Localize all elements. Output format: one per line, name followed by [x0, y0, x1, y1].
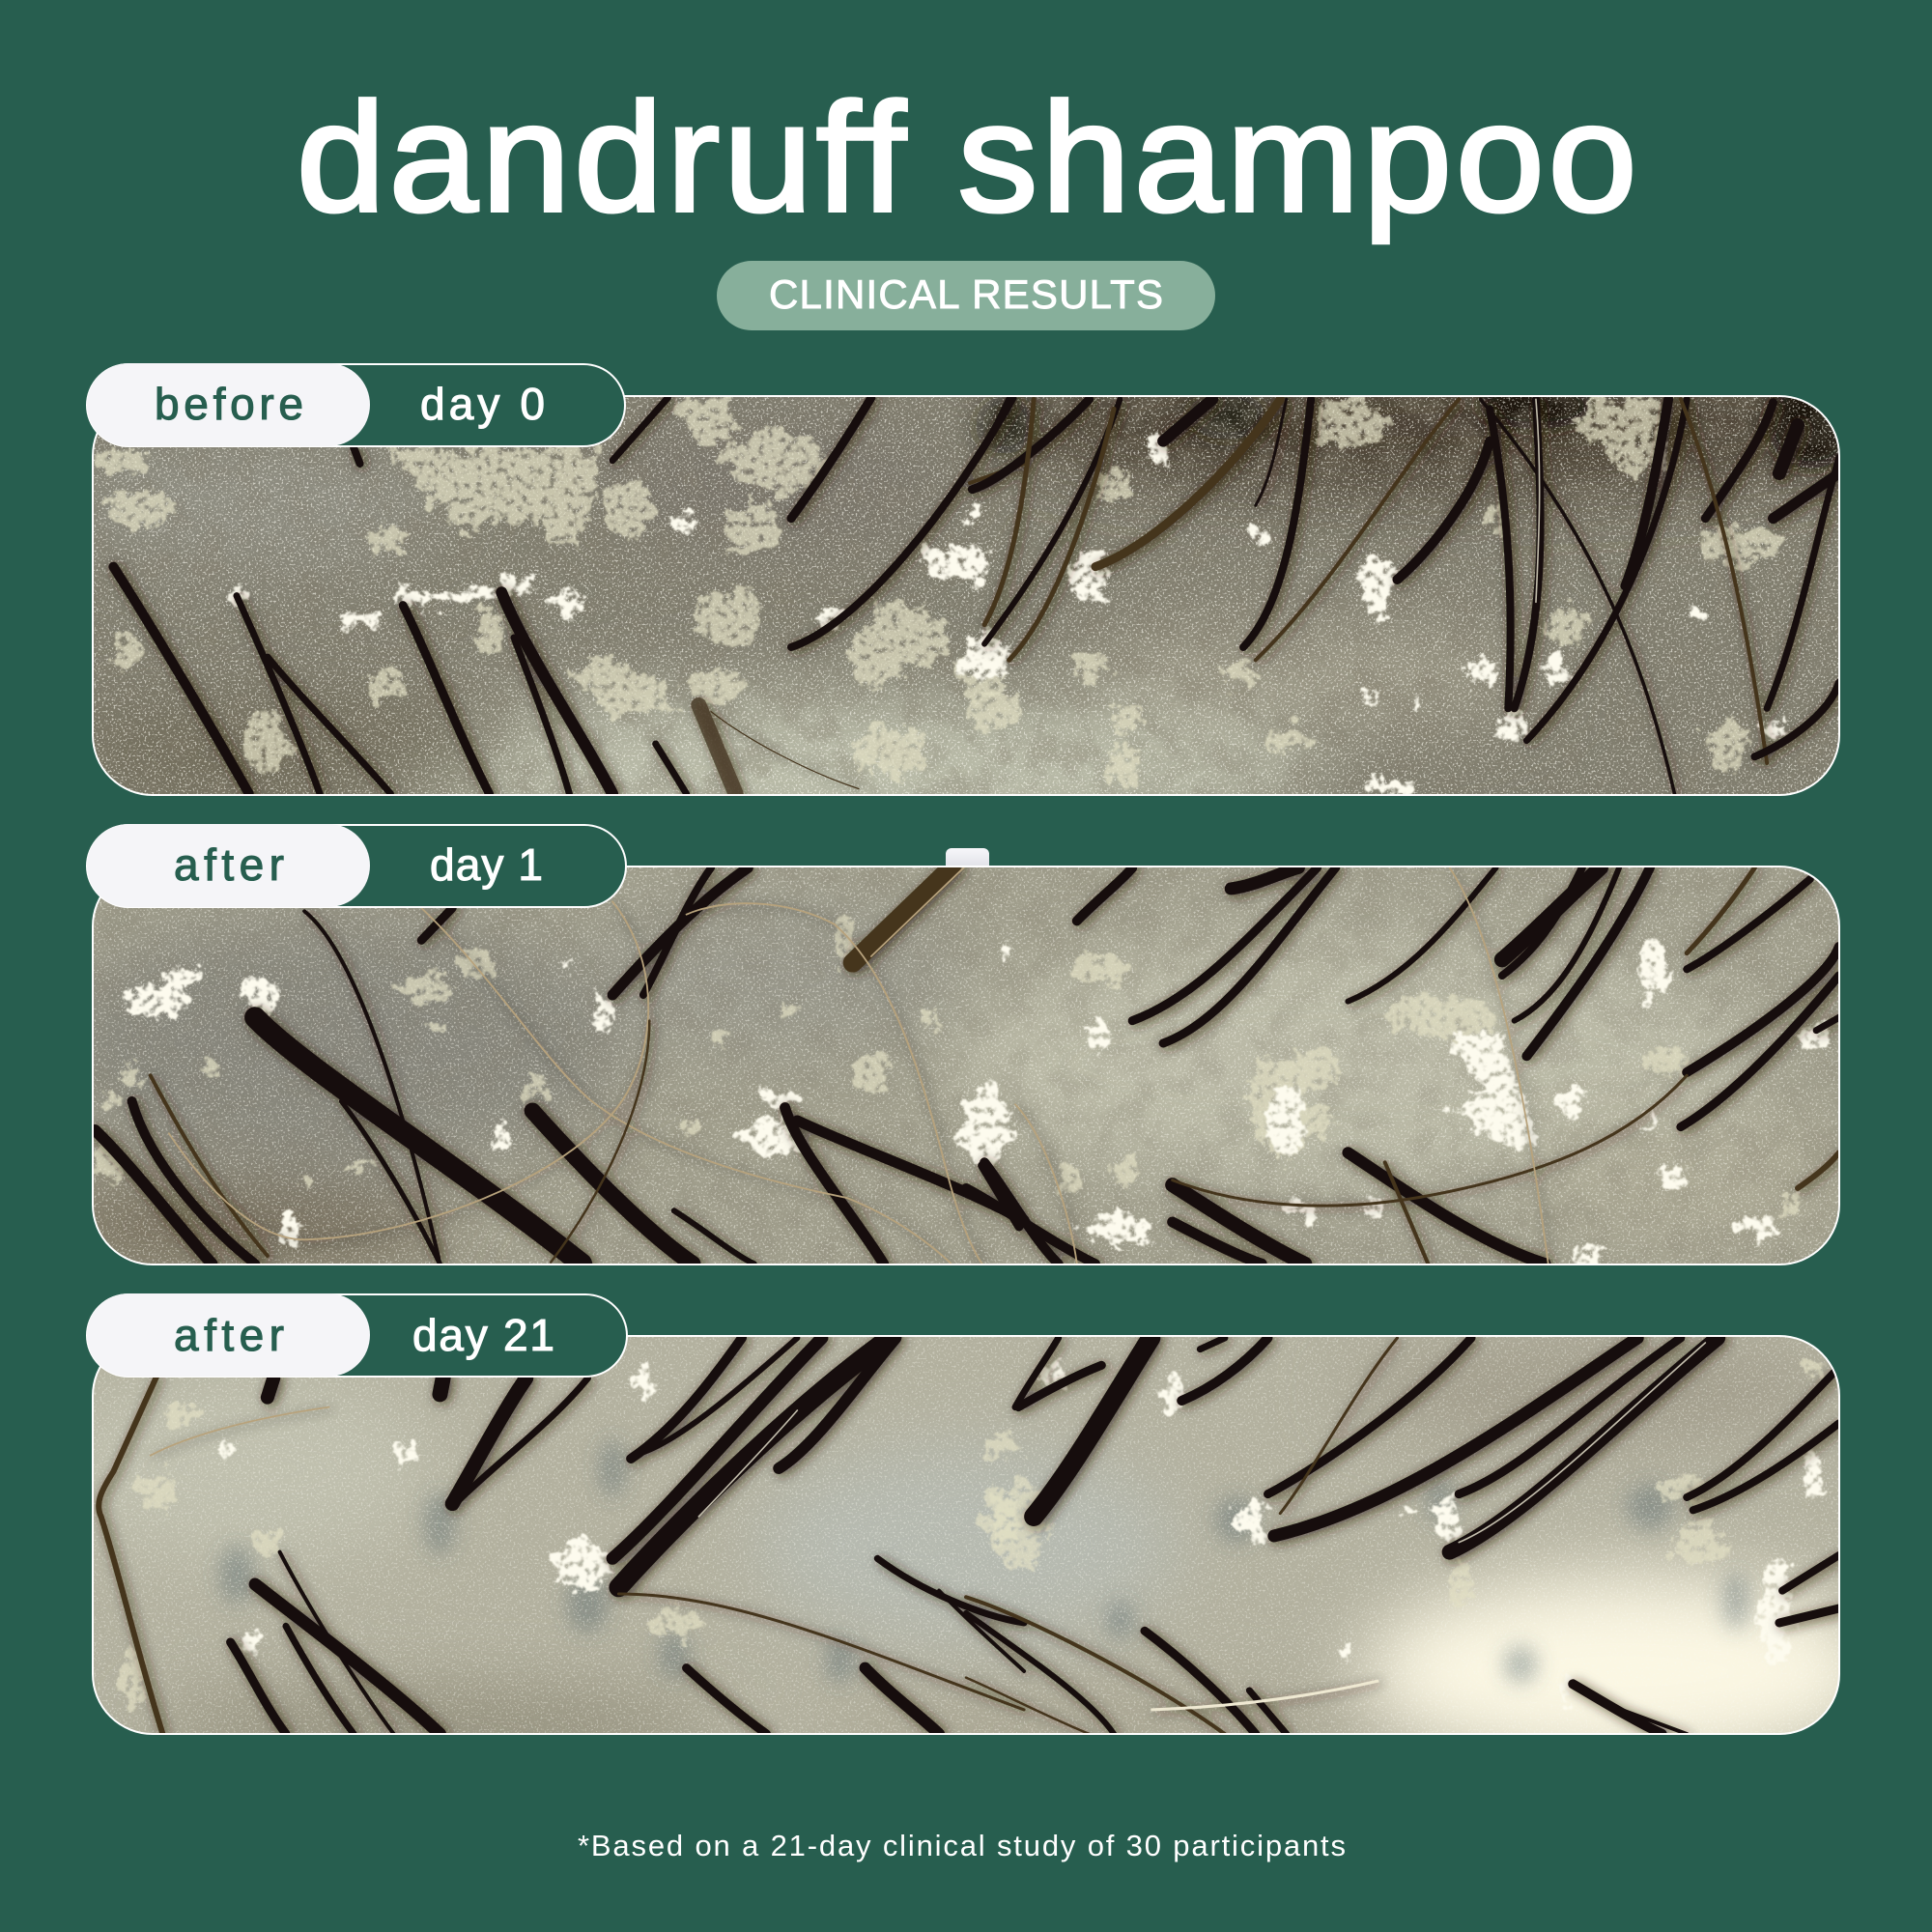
label: after / day 1: day 1 [430, 839, 543, 890]
frame outline [93, 1336, 1839, 1734]
panel: after day 21 [86, 1293, 1840, 1735]
frame outline [93, 867, 1839, 1264]
label: after / day 21 [87, 1293, 627, 1377]
bottle cap peeking above the photo [946, 848, 989, 871]
label: after / day 21: day 21 [412, 1310, 554, 1360]
photo: clean scalp day 21 [94, 1337, 1838, 1733]
footnote: *Based on a 21-day clinical study of 30 participants [578, 1829, 1346, 1862]
photo: scalp with fewer flakes day 1 [29, 867, 1864, 1265]
label: after / day 1: after [174, 839, 284, 890]
label: before / day 0 [87, 363, 625, 446]
label: before / day 0: day 0 [420, 379, 545, 429]
photo: scalp with heavy flakes day 0 [94, 397, 1838, 794]
label: after / day 1 [87, 824, 626, 907]
title: dandruff shampoo [297, 71, 1636, 243]
badge: clinical results: CLINICAL RESULTS [769, 271, 1163, 317]
label: after / day 21: after [174, 1310, 284, 1360]
panel: after day 1 [29, 824, 1864, 1265]
frame outline [93, 396, 1839, 795]
badge: clinical results [717, 261, 1215, 330]
label: before / day 0: before [155, 379, 303, 429]
panel: before day 0 [86, 363, 1840, 796]
